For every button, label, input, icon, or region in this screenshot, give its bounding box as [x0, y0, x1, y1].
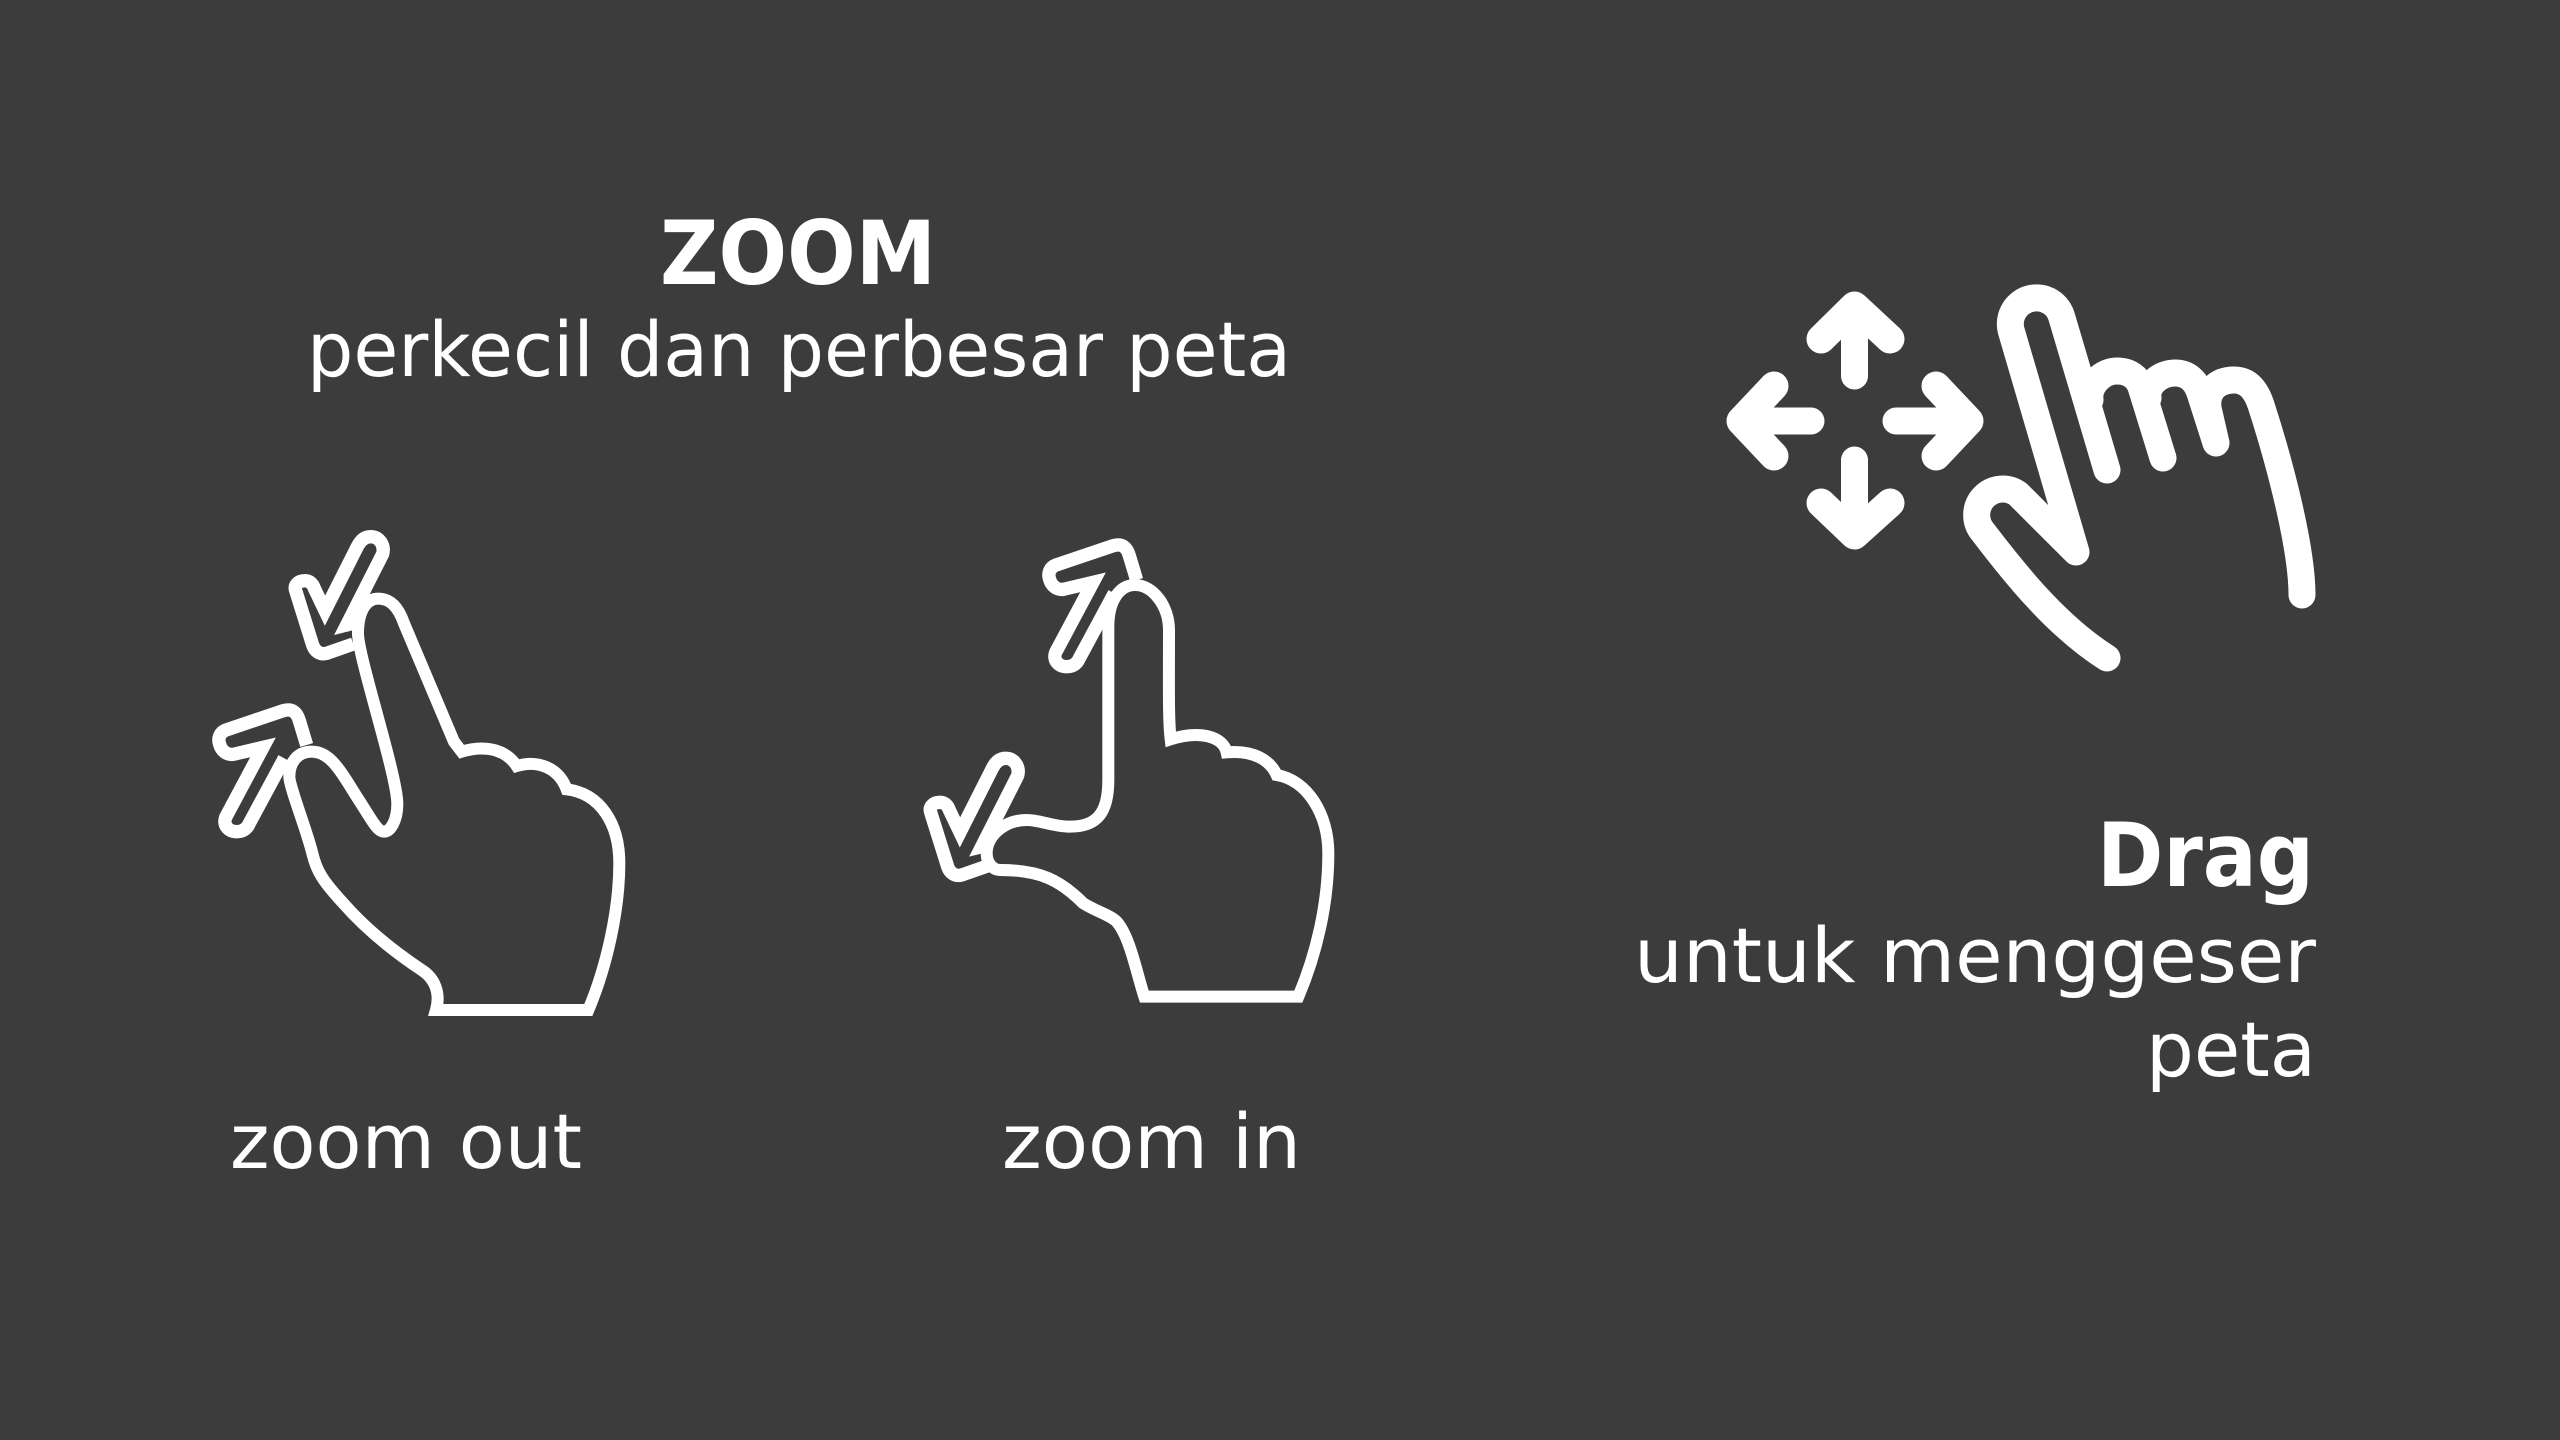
- title: ZOOM: ZOOM: [660, 202, 936, 305]
- arrow: right: [1896, 386, 1969, 456]
- label: zoom in: zoom in: [1002, 1097, 1301, 1186]
- label: zoom out: zoom out: [230, 1097, 582, 1186]
- arrow: lower inward arrow: [219, 710, 307, 832]
- arrow: left: [1741, 386, 1811, 456]
- arrow: upper inward arrow: [295, 537, 383, 654]
- icon: zoom out gesture hand: [219, 537, 619, 1010]
- subtitle: zoom description: perkecil dan perbesar peta: [307, 305, 1291, 394]
- hand outline: [289, 599, 619, 1010]
- text: drag description line one: untuk menggeser: [1634, 911, 2317, 1000]
- arrow: up: [1821, 306, 1890, 376]
- heading: Drag: Drag: [2097, 804, 2314, 907]
- icon: drag gesture: [1741, 298, 2302, 658]
- text: drag description line two: peta: [2146, 1005, 2316, 1094]
- icon: zoom in gesture hand: [930, 545, 1328, 997]
- hand: pointing finger outline: [1977, 298, 2302, 658]
- arrow: lower outward arrow: [930, 758, 1018, 875]
- hand outline: [987, 585, 1328, 997]
- arrow: down: [1821, 460, 1890, 535]
- arrow: upper outward arrow: [1049, 545, 1137, 667]
